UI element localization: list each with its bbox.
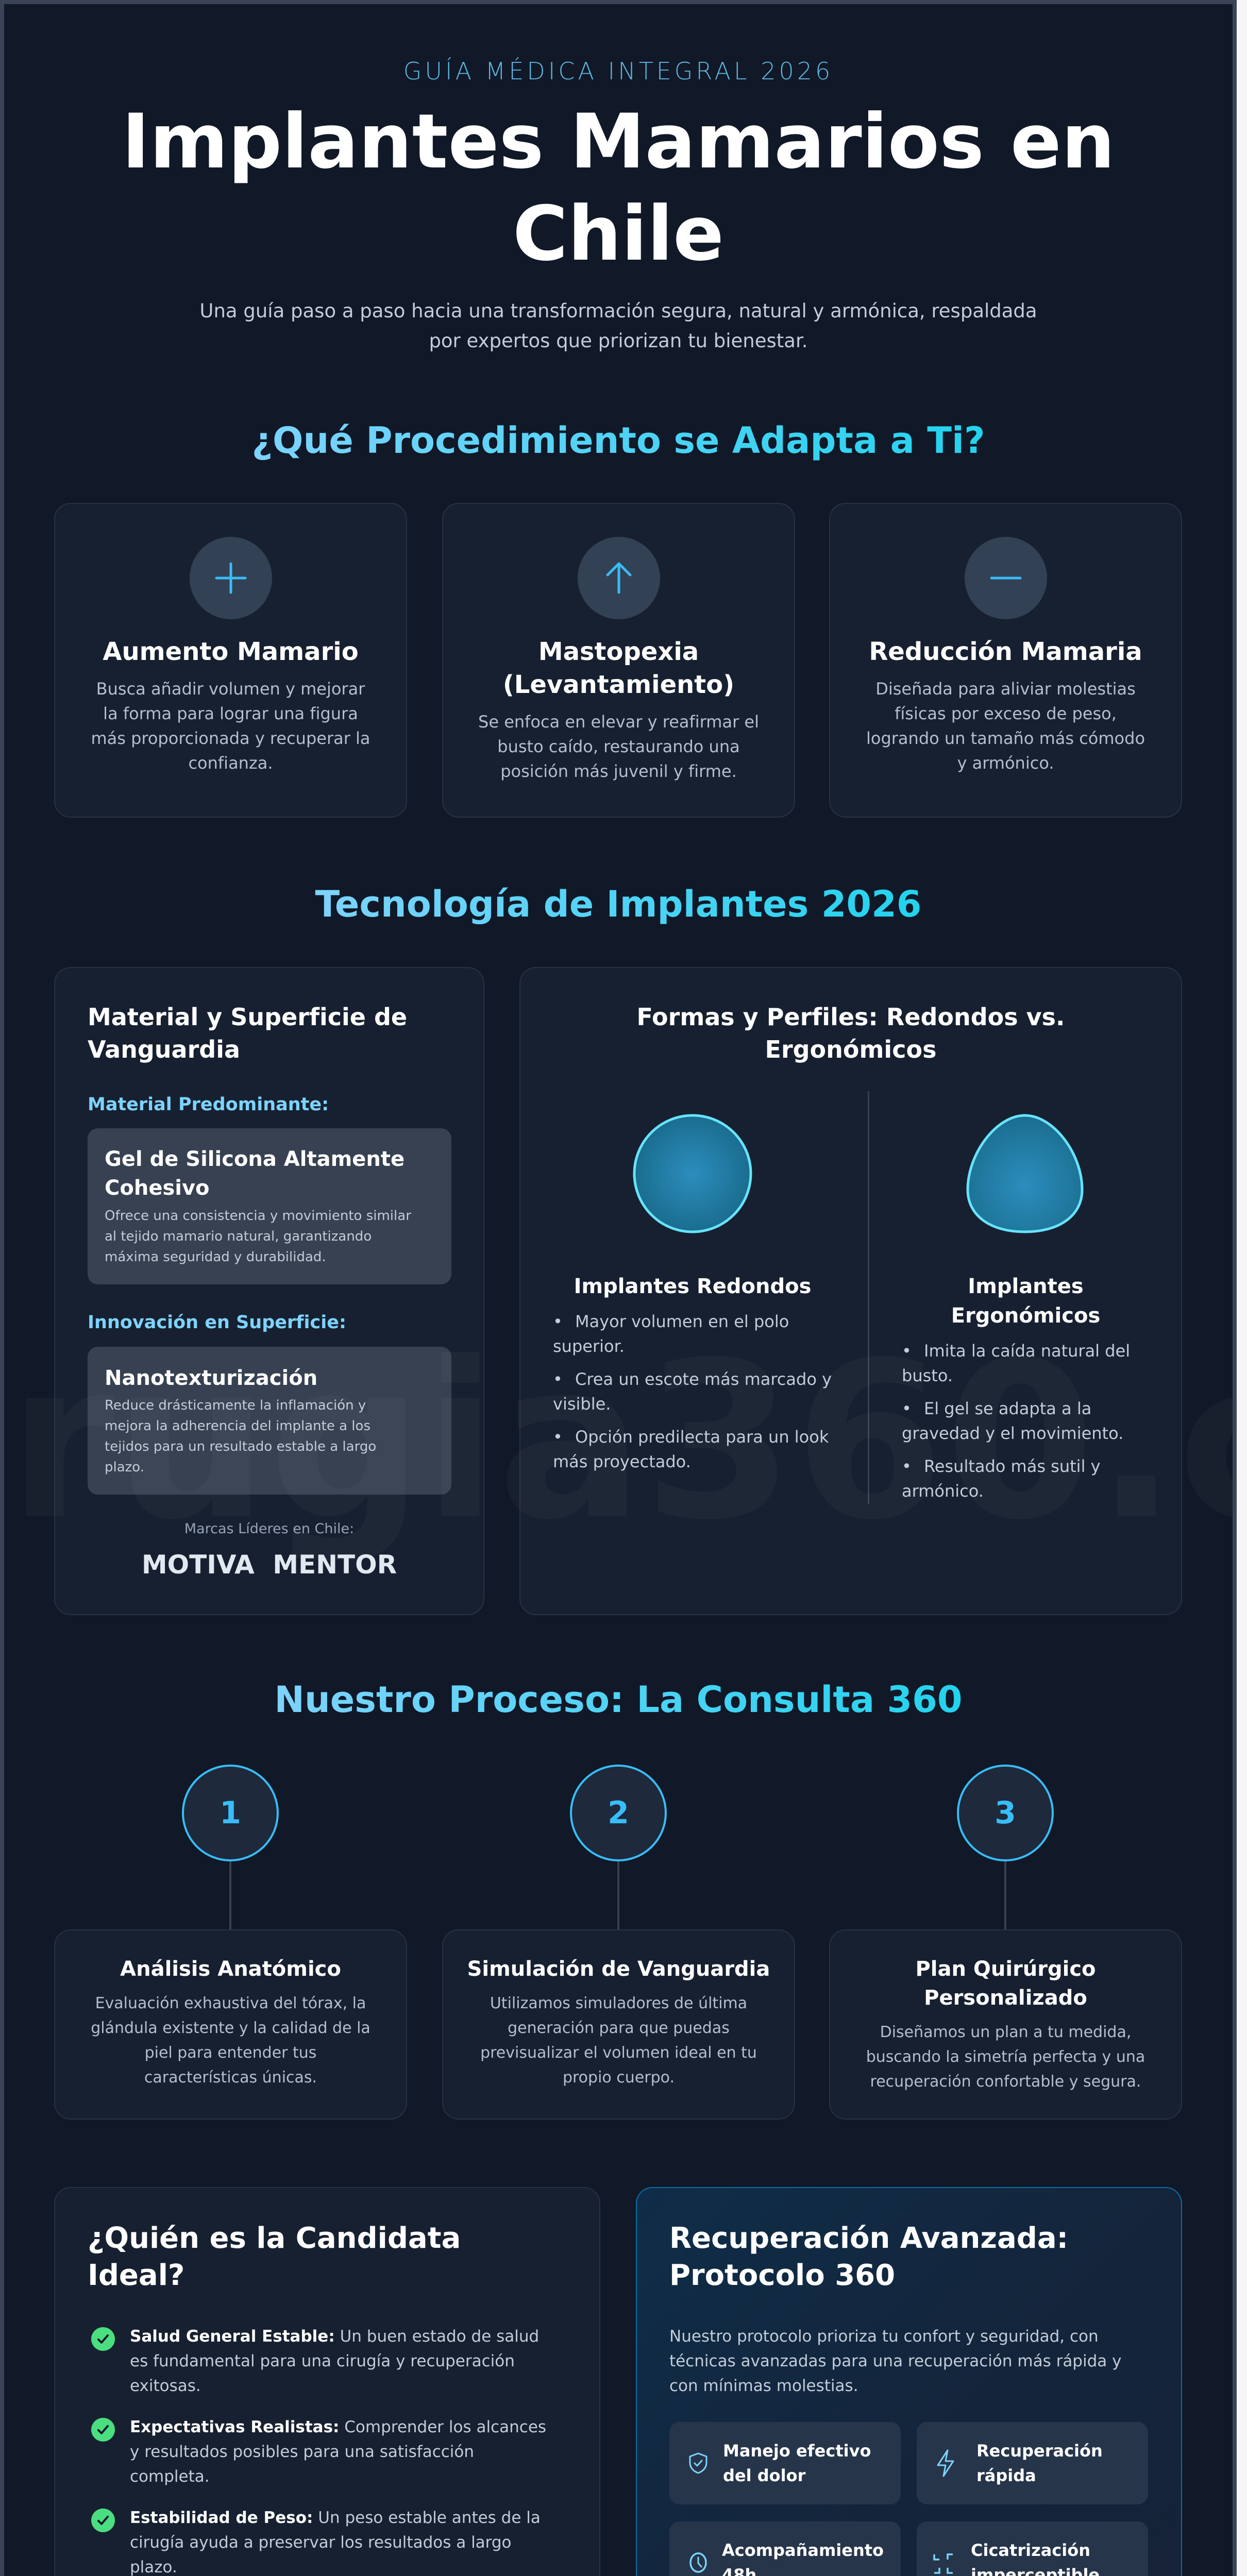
panel: candidata ideal: exitosas.: [130, 2377, 201, 2395]
label material: Material Predominante:: [88, 1094, 329, 1115]
panel: candidata ideal: Salud General Estable: Un buen estado de salud: [130, 2327, 539, 2346]
icon: minus: [965, 537, 1047, 619]
card: reduccion: [829, 503, 1182, 818]
connector: [1004, 1861, 1006, 1929]
feature: rapida: Recuperación: [976, 2441, 1103, 2461]
step 2: [442, 1765, 795, 2120]
card title: [503, 637, 734, 699]
step circle: 2: [608, 1795, 629, 1831]
box: nanotexturizacion: Reduce drásticamente la inflamación y: [105, 1398, 366, 1413]
step circle: [957, 1765, 1054, 1861]
step card: piel para entender tus: [145, 2044, 316, 2062]
icon: round implant: [633, 1114, 752, 1233]
column: redondos: [553, 1275, 832, 1471]
step card: características únicas.: [144, 2069, 317, 2087]
step circle: 3: [995, 1795, 1016, 1831]
panel title: Protocolo 360: [669, 2259, 895, 2292]
step card: Diseñamos un plan a tu medida,: [880, 2023, 1131, 2041]
column: redondos: Opción predilecta para un look: [575, 1427, 829, 1447]
box: gel silicona: máxima seguridad y durabilidad.: [105, 1249, 326, 1265]
box: gel silicona: Gel de Silicona Altamente: [105, 1147, 405, 1171]
card title: (Levantamiento): [503, 670, 734, 699]
heading: proceso: Nuestro Proceso: La Consulta 360: [274, 1679, 963, 1721]
step card: [829, 1929, 1182, 2120]
card text: [91, 679, 370, 773]
card text: más proporcionada y recuperar la: [91, 728, 370, 748]
panel title: Ergonómicos: [765, 1036, 936, 1063]
heading: tecnologia: Tecnología de Implantes 2026: [315, 883, 922, 925]
column: redondos: •: [553, 1369, 563, 1389]
box: nanotexturizacion: plazo.: [105, 1460, 144, 1475]
column: ergonomicos: [902, 1275, 1130, 1501]
feature: cicatrizacion: [917, 2521, 1148, 2576]
eyebrow: GUÍA MÉDICA INTEGRAL 2026: [403, 57, 833, 85]
column: redondos: Implantes Redondos: [574, 1275, 811, 1298]
title: Implantes Mamarios en: [122, 98, 1115, 185]
column: redondos: superior.: [553, 1336, 625, 1356]
heading: procedimientos: ¿Qué Procedimiento se Adapta a Ti?: [251, 419, 985, 462]
step 3: [829, 1765, 1182, 2120]
panel title: Vanguardia: [88, 1036, 240, 1063]
title: Chile: [513, 190, 724, 278]
panel: candidata ideal: es fundamental para una cirugía y recuperación: [130, 2352, 515, 2370]
feature: rapida: [917, 2422, 1148, 2504]
panel title: [669, 2222, 1068, 2292]
card title: Aumento Mamario: [103, 637, 359, 666]
icon: plus: [190, 537, 272, 619]
step card: previsualizar el volumen ideal en tu: [480, 2044, 757, 2062]
step card: [442, 1929, 795, 2120]
card text: Busca añadir volumen y mejorar: [96, 679, 365, 699]
card text: Diseñada para aliviar molestias: [875, 679, 1136, 699]
card text: logrando un tamaño más cómodo: [866, 728, 1145, 748]
card text: [866, 679, 1145, 773]
box: gel silicona: Cohesivo: [105, 1176, 210, 1200]
connector: [617, 1861, 619, 1929]
box: nanotexturizacion: Nanotexturización: [105, 1366, 317, 1390]
box: nanotexturizacion: mejora la adherencia del implante a los: [105, 1418, 370, 1434]
panel text: Nuestro protocolo prioriza tu confort y seguridad, con: [669, 2327, 1099, 2346]
box: gel silicona: Ofrece una consistencia y movimiento similar: [105, 1208, 411, 1224]
step circle: [570, 1765, 667, 1861]
card text: y armónico.: [957, 753, 1054, 773]
subtitle: Una guía paso a paso hacia una transformación segura, natural y armónica, respaldada: [199, 300, 1037, 322]
column: ergonomicos: Resultado más sutil y: [924, 1456, 1101, 1476]
item 3: [91, 2509, 541, 2576]
step circle: 1: [220, 1795, 241, 1831]
panel: candidata ideal: cirugía ayuda a preservar los resultados a largo: [130, 2533, 512, 2552]
step card: Análisis Anatómico: [120, 1957, 341, 1981]
icon: arrow up: [578, 537, 660, 619]
subtitle: por expertos que priorizan tu bienestar.: [429, 330, 808, 352]
step card: propio cuerpo.: [563, 2069, 675, 2087]
card: aumento mamario: [54, 503, 407, 818]
feature: cicatrizacion: Cicatrización: [971, 2540, 1090, 2560]
item 2: [91, 2418, 546, 2486]
column: redondos: Mayor volumen en el polo: [575, 1312, 789, 1331]
box: nanotexturizacion: [88, 1347, 451, 1495]
card text: [478, 712, 759, 781]
marcas label: Marcas Líderes en Chile:: [184, 1521, 354, 1537]
feature: acompanamiento: Acompañamiento: [722, 2540, 884, 2560]
step card: Personalizado: [924, 1986, 1087, 2010]
panel title: [88, 1003, 407, 1063]
column: redondos: •: [553, 1427, 563, 1447]
card title: Reducción Mamaria: [869, 637, 1142, 666]
step card: Simulación de Vanguardia: [467, 1957, 770, 1981]
feature: rapida: rápida: [976, 2466, 1036, 2485]
column: redondos: •: [553, 1312, 563, 1331]
panel text: [669, 2327, 1121, 2395]
column: redondos: más proyectado.: [553, 1452, 691, 1471]
label innovacion: Innovación en Superficie:: [88, 1312, 346, 1333]
box: nanotexturizacion: tejidos para un resultado estable a largo: [105, 1439, 376, 1454]
icon: ergonomic implant: [967, 1114, 1083, 1233]
step card: recuperación confortable y segura.: [870, 2073, 1141, 2091]
card text: la forma para lograr una figura: [103, 704, 358, 723]
connector: [229, 1861, 231, 1929]
column: ergonomicos: •: [902, 1341, 912, 1361]
panel: candidata ideal: Expectativas Realistas: Comprender los alcances: [130, 2418, 546, 2436]
step card: Plan Quirúrgico: [915, 1957, 1096, 1981]
column: ergonomicos: busto.: [902, 1366, 953, 1385]
panel: material: [54, 967, 484, 1615]
panel title: [88, 2222, 461, 2292]
card text: confianza.: [188, 753, 273, 773]
panel title: Material y Superficie de: [88, 1003, 407, 1031]
panel title: Formas y Perfiles: Redondos vs.: [636, 1003, 1065, 1031]
divider: [868, 1091, 869, 1504]
item 1: [91, 2327, 539, 2395]
card text: posición más juvenil y firme.: [500, 761, 737, 781]
box: gel silicona: al tejido mamario natural, garantizando: [105, 1229, 372, 1244]
column: ergonomicos: armónico.: [902, 1481, 984, 1501]
column: ergonomicos: Ergonómicos: [951, 1304, 1100, 1328]
column: ergonomicos: El gel se adapta a la: [924, 1399, 1091, 1418]
step card: buscando la simetría perfecta y una: [866, 2048, 1145, 2066]
column: ergonomicos: Implantes: [968, 1275, 1084, 1298]
panel: candidata ideal: plazo.: [130, 2558, 177, 2576]
feature: dolor: [669, 2422, 901, 2504]
card text: busto caído, restaurando una: [497, 737, 740, 756]
box: gel silicona: [88, 1128, 451, 1284]
panel text: con mínimas molestias.: [669, 2377, 858, 2395]
step card: Evaluación exhaustiva del tórax, la: [95, 1994, 366, 2012]
step card: generación para que puedas: [508, 2019, 730, 2037]
feature: acompanamiento: [669, 2521, 901, 2576]
subtitle: [199, 300, 1037, 352]
panel title: [636, 1003, 1065, 1063]
column: ergonomicos: •: [902, 1456, 912, 1476]
panel title: Ideal?: [88, 2259, 184, 2292]
panel: candidata ideal: [54, 2187, 600, 2576]
column: ergonomicos: Imita la caída natural del: [924, 1341, 1130, 1361]
step circle: [182, 1765, 279, 1861]
title: [122, 98, 1115, 278]
panel: candidata ideal: Estabilidad de Peso: Un peso estable antes de la: [130, 2509, 541, 2527]
panel: candidata ideal: y resultados posibles para una satisfacción: [130, 2443, 474, 2461]
feature: dolor: del dolor: [723, 2466, 805, 2485]
card text: Se enfoca en elevar y reafirmar el: [478, 712, 759, 732]
feature: dolor: Manejo efectivo: [723, 2441, 871, 2461]
card text: físicas por exceso de peso,: [895, 704, 1117, 723]
column: redondos: Crea un escote más marcado y: [575, 1369, 832, 1389]
column: ergonomicos: gravedad y el movimiento.: [902, 1423, 1123, 1443]
panel: candidata ideal: completa.: [130, 2467, 210, 2486]
panel title: ¿Quién es la Candidata: [88, 2222, 461, 2255]
panel: formas: [519, 967, 1182, 1615]
column: ergonomicos: •: [902, 1399, 912, 1418]
step 1: [54, 1765, 407, 2120]
panel: recuperacion: [636, 2187, 1182, 2576]
panel text: técnicas avanzadas para una recuperación más rápida y: [669, 2352, 1121, 2370]
column: redondos: visible.: [553, 1394, 611, 1414]
step card: glándula existente y la calidad de la: [91, 2019, 370, 2037]
step card: [54, 1929, 407, 2120]
panel title: Recuperación Avanzada:: [669, 2222, 1068, 2255]
step card: Utilizamos simuladores de última: [490, 1994, 747, 2012]
card title: Mastopexia: [538, 637, 699, 666]
card: mastopexia: [442, 503, 795, 818]
brands: MOTIVA MENTOR: [142, 1550, 397, 1580]
